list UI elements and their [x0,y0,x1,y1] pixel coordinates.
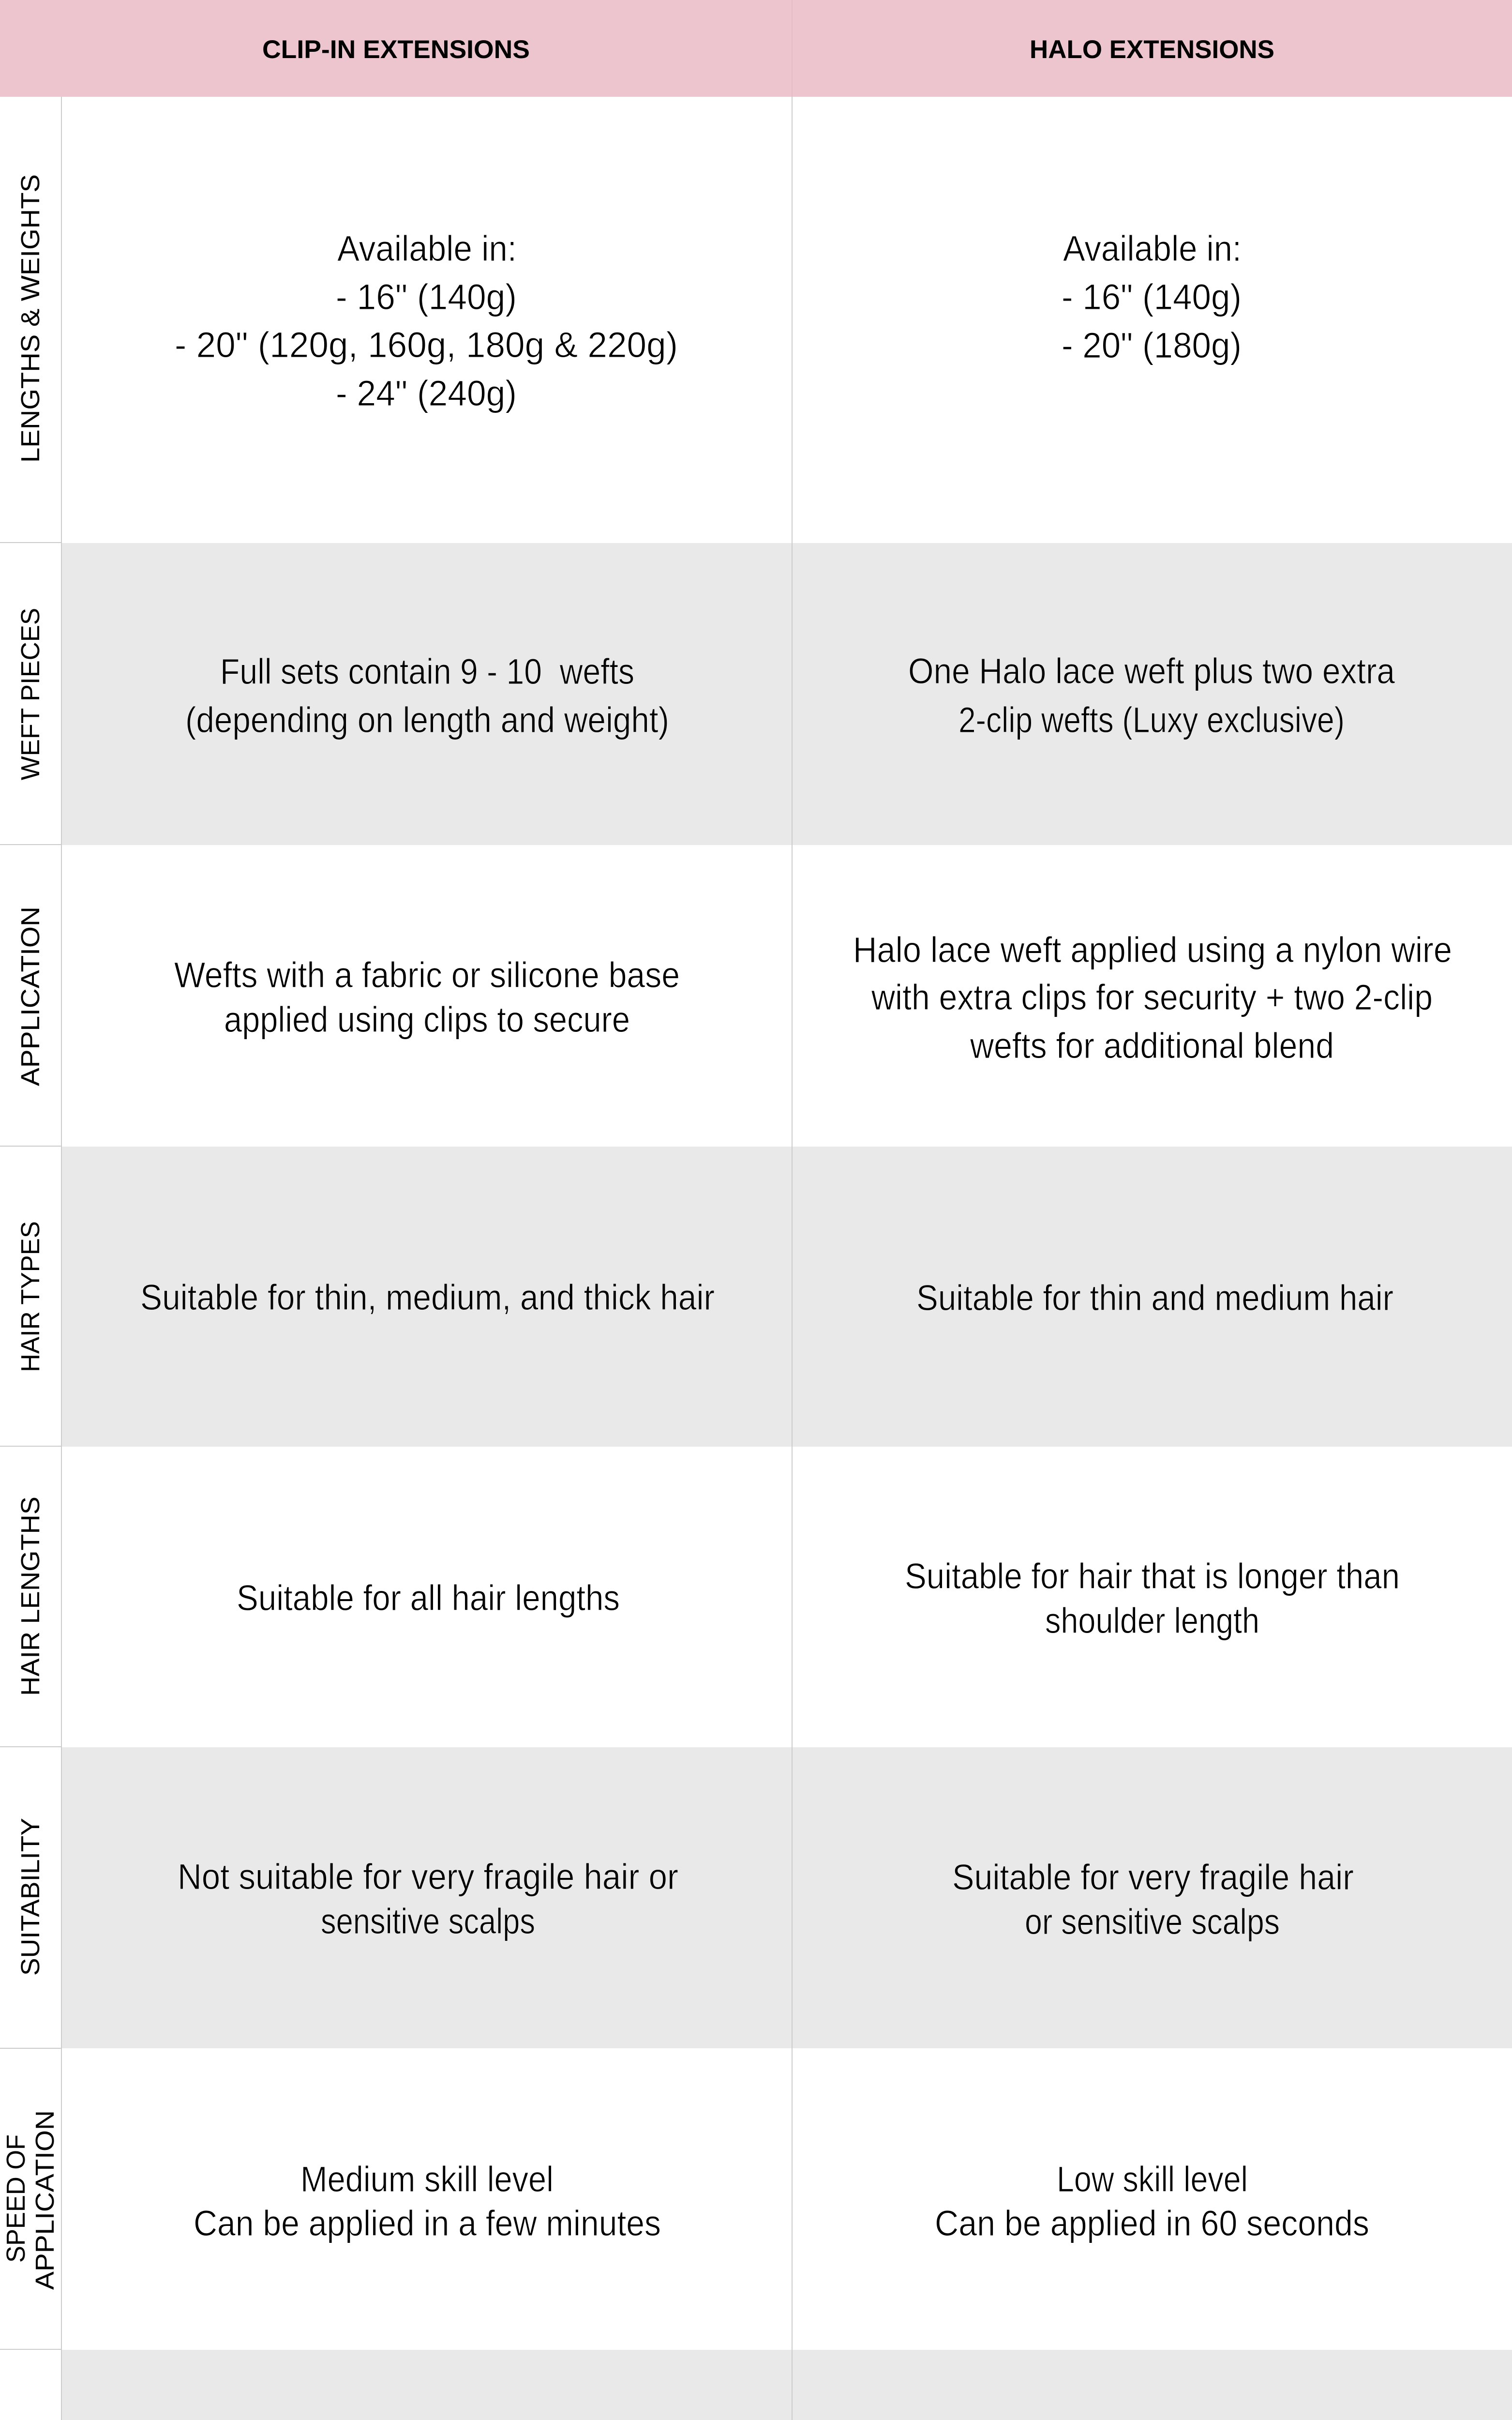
halo lengths and weights text: Available in: [1063,228,1242,269]
row: hairstyles [16,2350,1512,2420]
row label: hair types: HAIR TYPES [16,1221,45,1372]
heading: clip-in extensions: CLIP-IN EXTENSIONS [262,35,530,64]
row: lengths and weights [16,97,1512,543]
clip-in speed text: Can be applied in a few minutes [194,2203,661,2243]
heading: halo extensions: HALO EXTENSIONS [1030,35,1274,64]
clip-in lengths and weights text: - 16" (140g) [336,277,517,317]
row label: speed of application: APPLICATION [30,2110,60,2290]
row label: speed of application: SPEED OF [1,2134,30,2263]
clip-in lengths and weights text [175,228,678,413]
row label: lengths and weights: LENGTHS & WEIGHTS [16,174,45,463]
halo application text: wefts for additional blend [970,1026,1334,1066]
halo suitability text: or sensitive scalps [1025,1902,1280,1942]
clip-in suitability text: Not suitable for very fragile hair or [178,1857,678,1897]
row: application [16,845,1512,1147]
clip-in application text: Wefts with a fabric or silicone base [174,955,680,995]
halo hair lengths text [905,1556,1400,1641]
halo weft pieces text [908,651,1395,740]
halo speed text: Low skill level [1057,2159,1248,2199]
clip-in speed text [194,2159,661,2243]
row: suitability [16,1747,1512,2048]
halo application text: Halo lace weft applied using a nylon wire [853,930,1452,970]
row label: application: APPLICATION [16,907,45,1086]
clip-in weft pieces text [185,651,669,740]
halo hair types text: Suitable for thin and medium hair [916,1278,1393,1318]
halo suitability text: Suitable for very fragile hair [952,1857,1354,1897]
halo weft pieces text: 2-clip wefts (Luxy exclusive) [958,700,1345,740]
halo speed text: Can be applied in 60 seconds [935,2203,1369,2243]
row label: weft pieces: WEFT PIECES [16,608,45,780]
halo suitability text [952,1857,1354,1942]
clip-in application text: applied using clips to secure [224,999,630,1040]
clip-in application text [174,955,680,1040]
halo application text [853,930,1452,1066]
clip-in lengths and weights text: - 20" (120g, 160g, 180g & 220g) [175,325,678,365]
halo speed text [935,2159,1369,2243]
row: weft pieces [16,543,1512,845]
row: speed of application [1,2048,1512,2350]
halo lengths and weights text: - 20" (180g) [1062,325,1242,365]
clip-in weft pieces text: (depending on length and weight) [185,700,669,740]
clip-in suitability text [178,1857,678,1941]
clip-in lengths and weights text: - 24" (240g) [336,373,517,413]
header bar [0,0,1512,97]
clip-in speed text: Medium skill level [300,2159,554,2199]
row: hair lengths [16,1447,1512,1747]
halo weft pieces text: One Halo lace weft plus two extra [908,651,1395,691]
clip-in suitability text: sensitive scalps [321,1901,535,1941]
halo hair lengths text: Suitable for hair that is longer than [905,1556,1400,1596]
halo hair lengths text: shoulder length [1045,1601,1259,1641]
row label: suitability: SUITABILITY [16,1818,45,1976]
halo lengths and weights text: - 16" (140g) [1062,277,1242,317]
clip-in lengths and weights text: Available in: [337,228,517,269]
halo lengths and weights text [1062,228,1242,365]
clip-in hair types text: Suitable for thin, medium, and thick hair [140,1277,715,1317]
row label: hair lengths: HAIR LENGTHS [16,1497,45,1696]
row label: speed of application [1,2110,60,2290]
clip-in weft pieces text: Full sets contain 9 - 10 wefts [220,651,634,692]
halo application text: with extra clips for security + two 2-clip [871,977,1433,1017]
clip-in hair lengths text: Suitable for all hair lengths [237,1578,620,1618]
row: hair types [16,1147,1512,1447]
